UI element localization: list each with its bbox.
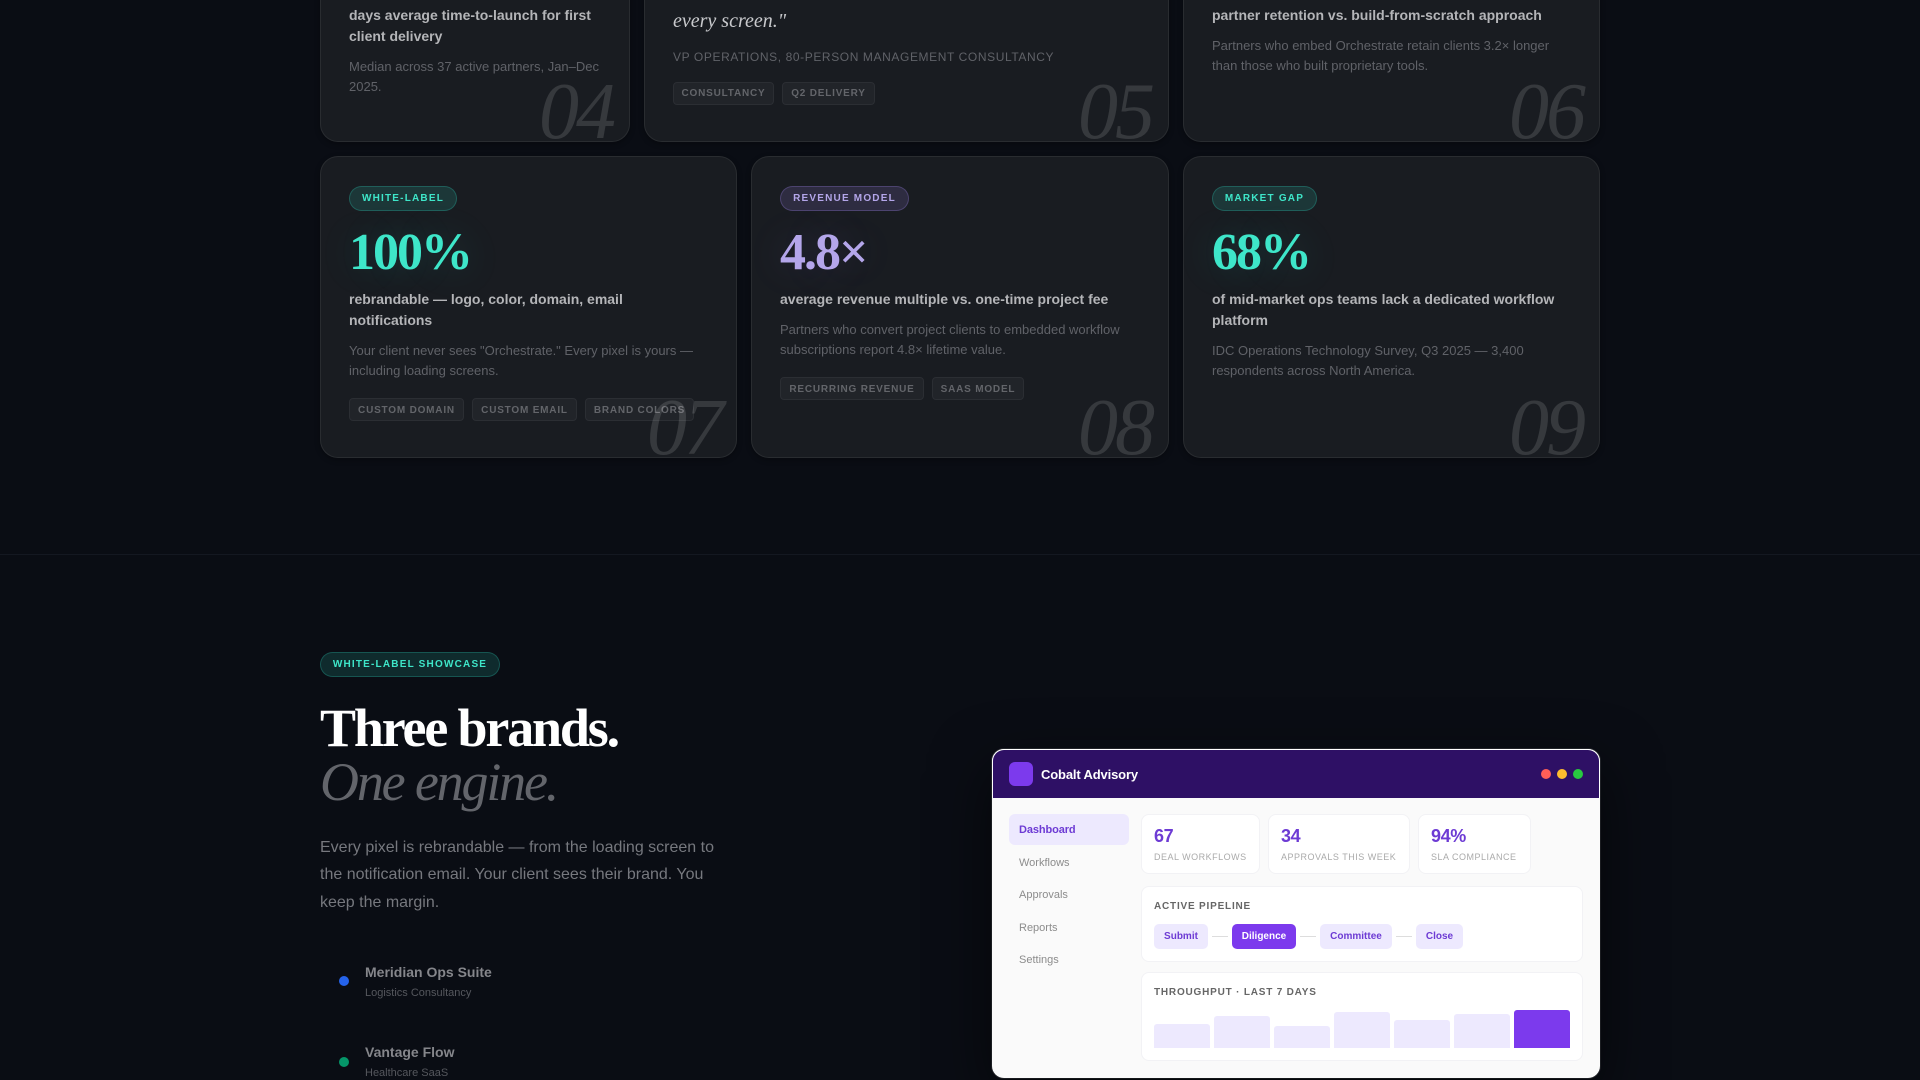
badge: white-label showcase: WHITE-LABEL SHOWCASE	[333, 659, 487, 670]
text: card 06 statement: partner retention vs. build-from-scratch approach	[1212, 7, 1542, 23]
text: card 08 detail: Partners who convert project clients to embedded workflow	[780, 322, 1120, 337]
tag: recurring revenue	[780, 377, 924, 400]
label: DEAL WORKFLOWS	[1154, 852, 1247, 862]
panel: card 04 time-to-launch	[320, 0, 630, 142]
nav: dashboard: Dashboard	[1019, 824, 1076, 836]
text: card 09 detail: IDC Operations Technology Survey, Q3 2025 — 3,400	[1212, 343, 1524, 358]
text: card 06 detail	[1212, 38, 1549, 73]
panel: card 07 white-label	[320, 156, 737, 458]
brand name: Vantage Flow	[365, 1044, 454, 1060]
step: diligence: Diligence	[1242, 931, 1286, 942]
brand item: vantage flow	[339, 1044, 454, 1079]
panel: dashboard mockup	[992, 749, 1600, 1078]
step: close: Close	[1426, 931, 1453, 942]
text: card 07 statement	[349, 291, 623, 328]
sidebar active item	[1009, 814, 1129, 845]
badge: white-label	[349, 186, 457, 211]
text: showcase intro: keep the margin.	[320, 894, 439, 911]
nav: workflows: Workflows	[1019, 857, 1070, 869]
step: submit	[1154, 924, 1208, 949]
text: card 04 statement: client delivery	[349, 28, 442, 44]
heading: three brands, one engine: One engine.	[320, 752, 557, 812]
number: 08: 08	[1078, 384, 1152, 472]
nav: settings: Settings	[1019, 954, 1059, 966]
tag: brand colors: BRAND COLORS	[594, 405, 685, 416]
label: SLA COMPLIANCE	[1431, 852, 1517, 862]
stat: 68%: 68%	[1212, 224, 1310, 281]
stat card: deal workflows	[1141, 814, 1260, 874]
nav: reports: Reports	[1019, 922, 1058, 934]
tag: saas model	[932, 377, 1024, 400]
icon: blue brand dot	[339, 976, 349, 986]
throughput label: THROUGHPUT · LAST 7 DAYS	[1154, 987, 1317, 998]
stat: 100%: 100%	[349, 224, 471, 281]
panel: throughput	[1141, 972, 1583, 1061]
tag: brand colors	[585, 398, 694, 421]
tag: q2 delivery	[782, 82, 875, 105]
connector	[1212, 936, 1228, 937]
number: 06: 06	[1509, 68, 1583, 156]
value: 94%	[1431, 826, 1466, 846]
badge: market gap	[1212, 186, 1317, 211]
text: showcase intro: the notification email. Your client sees their brand. You	[320, 866, 703, 883]
text: showcase intro: Every pixel is rebrandable — from the loading screen to	[320, 839, 714, 856]
text: card 04 detail: 2025.	[349, 79, 382, 94]
connector	[1300, 936, 1316, 937]
badge: white-label showcase	[320, 652, 500, 677]
text: card 06 detail: than those who built proprietary tools.	[1212, 58, 1428, 73]
heading: three brands, one engine	[320, 698, 618, 812]
text: card 07 statement: rebrandable — logo, color, domain, email	[349, 291, 623, 307]
label: APPROVALS THIS WEEK	[1281, 852, 1396, 862]
text: card 04 statement	[349, 7, 591, 44]
panel: card 06 retention	[1183, 0, 1600, 142]
stat card: approvals this week	[1268, 814, 1410, 874]
step: submit: Submit	[1164, 931, 1198, 942]
text: card 08 detail	[780, 322, 1120, 357]
text: card 09 statement: platform	[1212, 312, 1268, 328]
badge: revenue model: REVENUE MODEL	[793, 193, 896, 204]
tag: consultancy: CONSULTANCY	[682, 88, 765, 99]
panel: card 08 revenue model	[751, 156, 1169, 458]
text: card 04 detail	[349, 59, 599, 94]
tag: custom email	[472, 398, 577, 421]
connector	[1396, 936, 1412, 937]
number: 04: 04	[539, 68, 613, 156]
panel: card 09 market gap	[1183, 156, 1600, 458]
text: card 06 detail: Partners who embed Orchestrate retain clients 3.2× longer	[1212, 38, 1549, 53]
tag: q2 delivery: Q2 DELIVERY	[791, 88, 866, 99]
tag: consultancy	[673, 82, 774, 105]
text: card 07 detail: including loading screens.	[349, 363, 499, 378]
text: quote attribution: VP OPERATIONS, 80-PERSON MANAGEMENT CONSULTANCY	[673, 50, 1054, 64]
tag: custom domain	[349, 398, 464, 421]
text: card 07 detail: Your client never sees "Orchestrate." Every pixel is yours —	[349, 343, 693, 358]
text: card 09 detail: respondents across North America.	[1212, 363, 1415, 378]
brand sector: Healthcare SaaS	[365, 1067, 448, 1079]
brand sector: Logistics Consultancy	[365, 987, 471, 999]
number: 07: 07	[647, 384, 721, 472]
step: committee	[1320, 924, 1392, 949]
icon: green brand dot	[339, 1057, 349, 1067]
text: showcase intro	[320, 839, 714, 911]
badge: revenue model	[780, 186, 909, 211]
number: 05: 05	[1078, 68, 1152, 156]
panel: active pipeline	[1141, 886, 1583, 962]
step: diligence	[1232, 924, 1296, 949]
step: close	[1416, 924, 1463, 949]
pipeline label: ACTIVE PIPELINE	[1154, 901, 1251, 912]
text: card 09 statement: of mid-market ops teams lack a dedicated workflow	[1212, 291, 1554, 307]
nav: approvals: Approvals	[1019, 889, 1068, 901]
heading: three brands, one engine: Three brands.	[320, 698, 618, 758]
text: card 07 detail	[349, 343, 693, 378]
text: card 09 statement	[1212, 291, 1554, 328]
value: 34	[1281, 826, 1300, 846]
brand name: Meridian Ops Suite	[365, 964, 492, 980]
bar chart: last 7 days	[1154, 1010, 1570, 1048]
step: committee: Committee	[1330, 931, 1382, 942]
text: card 08 statement: average revenue multiple vs. one-time project fee	[780, 291, 1108, 307]
tag: recurring revenue: RECURRING REVENUE	[789, 384, 915, 395]
number: 09: 09	[1509, 384, 1583, 472]
text: quote ending: every screen."	[673, 10, 786, 32]
dashboard header bar	[992, 749, 1600, 798]
icon: brand logo	[1009, 762, 1033, 786]
value: 67	[1154, 826, 1173, 846]
dashboard brand name: Cobalt Advisory	[1041, 767, 1138, 782]
stat card: sla compliance	[1418, 814, 1531, 874]
text: card 04 statement: days average time-to-launch for first	[349, 7, 591, 23]
tag: custom domain: CUSTOM DOMAIN	[358, 405, 455, 416]
text: card 07 statement: notifications	[349, 312, 432, 328]
text: card 09 detail	[1212, 343, 1524, 378]
panel: card 05 quote	[644, 0, 1169, 142]
icon: window dots	[1541, 769, 1583, 779]
tag: custom email: CUSTOM EMAIL	[481, 405, 568, 416]
text: card 08 detail: subscriptions report 4.8× lifetime value.	[780, 342, 1006, 357]
text: card 04 detail: Median across 37 active partners, Jan–Dec	[349, 59, 599, 74]
tag: saas model: SAAS MODEL	[941, 384, 1015, 395]
badge: white-label: WHITE-LABEL	[362, 193, 444, 204]
badge: market gap: MARKET GAP	[1225, 193, 1304, 204]
brand item: meridian ops suite	[339, 964, 492, 999]
stat: 4.8x: 4.8×	[780, 224, 867, 281]
